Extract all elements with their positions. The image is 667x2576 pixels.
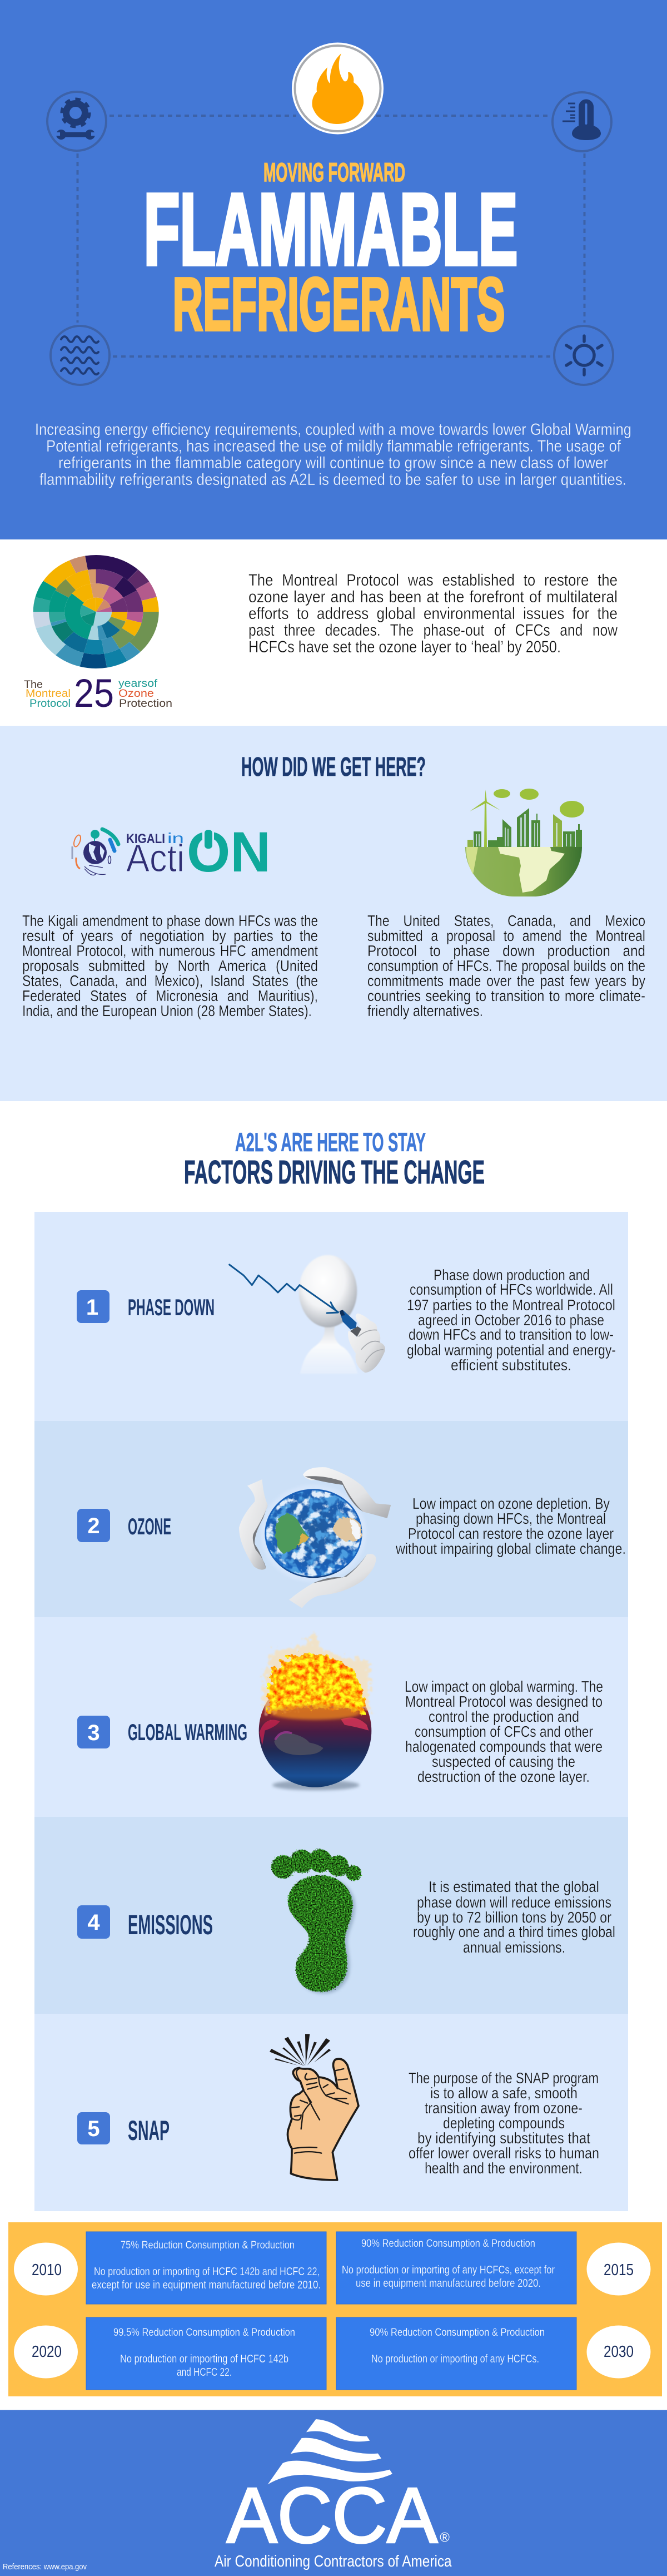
text: emissions: roughly one and a third times global	[413, 1923, 615, 1940]
text: phase down: efficient substitutes.	[451, 1356, 571, 1374]
text: emissions	[413, 1878, 615, 1956]
card 2030: No production or importing of any HCFCs.	[371, 2353, 539, 2365]
icon: waves	[51, 326, 109, 385]
text: emissions: phase down will reduce emissions	[417, 1894, 611, 1911]
text: SNAP	[409, 2069, 599, 2177]
logo text: 25 years of ozone protection: Protection	[119, 698, 172, 710]
text: phase down: global warming potential and energy-	[407, 1341, 616, 1359]
icon: flame badge	[292, 42, 384, 135]
Montreal Protocol text: efforts to address global environmental issues for the	[248, 605, 618, 623]
text: Kigali amendment: result of years of negotiation by parties to the	[22, 927, 318, 944]
badge 5	[77, 2112, 110, 2144]
logo text: 25 years of ozone protection: Ozone	[118, 688, 154, 700]
text: Kigali amendment: Federated States of Micronesia and Mauritius),	[22, 987, 318, 1004]
year 2010: 2010	[32, 2261, 62, 2279]
ring 3	[41, 562, 152, 662]
text: SNAP: depleting compounds	[443, 2114, 565, 2132]
logo: ACCA: Air Conditioning Contractors of America	[215, 2553, 452, 2570]
text: Kigali amendment	[22, 912, 318, 1019]
text: phase down: down HFCs and to transition to low-	[409, 1326, 614, 1343]
year 2015: 2015	[604, 2261, 634, 2279]
illustration: snapping fingers	[270, 2034, 359, 2180]
panel: 5 SNAP	[34, 2014, 628, 2211]
text: global warming: consumption of CFCs and other	[415, 1723, 593, 1740]
text: ozone: without impairing global climate change.	[395, 1540, 626, 1557]
card 2015	[336, 2232, 576, 2304]
text: global warming	[405, 1678, 603, 1785]
illustration: grass footprint	[271, 1849, 361, 1994]
illustration: green earth city	[465, 789, 584, 896]
headings: factors driving the change: A2L'S ARE HERE TO STAY	[235, 1127, 426, 1157]
logo text: 25 years of ozone protection: 25	[74, 672, 114, 716]
badge 2	[77, 1509, 110, 1542]
label: global warming: GLOBAL WARMING	[128, 1719, 247, 1745]
panel: phase-out timeline	[8, 2222, 662, 2396]
title: MOVING FORWARD	[263, 158, 405, 187]
year 2020	[14, 2326, 78, 2378]
text: United States, Canada, Mexico proposal	[367, 912, 645, 1019]
card 2010	[86, 2232, 326, 2304]
card 2030: 90% Reduction Consumption & Production	[370, 2326, 545, 2339]
year 2015	[587, 2242, 650, 2296]
text: Kigali amendment: The Kigali amendment to phase down HFCs was the	[22, 912, 318, 929]
text: SNAP: The purpose of the SNAP program	[409, 2069, 599, 2087]
badge 4	[77, 1905, 110, 1939]
badge 3	[77, 1716, 110, 1748]
card 2010: 75% Reduction Consumption & Production	[121, 2239, 295, 2251]
text: global warming: control the production and	[429, 1708, 579, 1725]
text: phase down: agreed in October 2016 to phase	[418, 1311, 604, 1329]
text: global warming: halogenated compounds that were	[405, 1738, 603, 1755]
text: phase down: Phase down production and	[434, 1266, 590, 1284]
logo: Montreal Protocol colour wheel	[18, 542, 174, 682]
icon: gear and wrench	[47, 92, 106, 151]
text: SNAP: health and the environment.	[425, 2159, 583, 2177]
text: Kigali amendment: proposals submitted by North America (United	[22, 957, 318, 974]
panel: 2 ozone	[34, 1421, 628, 1617]
logo text: 25 years of ozone protection: Protocol	[29, 698, 71, 710]
card 2010: No production or importing of HCFC 142b and HCFC 22,	[94, 2266, 320, 2278]
dashed connector frame	[78, 116, 585, 356]
badge 4: 4	[87, 1910, 100, 1935]
logo text: 25 years of ozone protection: Montreal	[26, 688, 71, 700]
illustration: figure drawing falling line	[230, 1255, 385, 1374]
logo: ACCA: ®	[440, 2530, 450, 2545]
card 2015: 90% Reduction Consumption & Production	[361, 2237, 535, 2250]
text: phase down: consumption of HFCs worldwide. All	[410, 1281, 613, 1298]
illustration: earth on fire	[259, 1631, 371, 1790]
card 2030	[336, 2317, 576, 2390]
text: emissions: by up to 72 billion tons by 2050 or	[417, 1909, 611, 1926]
panel: 4 emissions	[34, 1817, 628, 2014]
text: emissions: It is estimated that the global	[429, 1878, 599, 1895]
text: ozone: phasing down HFCs, the Montreal	[416, 1510, 606, 1527]
text: global warming: Low impact on global warming. The	[405, 1678, 603, 1695]
card 2010: except for use in equipment manufactured before 2010.	[92, 2279, 321, 2291]
text: SNAP: transition away from ozone-	[425, 2099, 583, 2117]
panel: footer	[0, 2410, 667, 2576]
ring 4	[18, 542, 174, 682]
label: ozone: OZONE	[128, 1513, 171, 1539]
logo text: 25 years of ozone protection: The	[24, 679, 43, 691]
ring 2	[63, 582, 129, 642]
logo text: 25 years of ozone protection: yearsof	[118, 678, 158, 690]
logo: Kigali in Action	[72, 820, 271, 884]
text: global warming: destruction of the ozone layer.	[417, 1768, 590, 1785]
logo: Kigali in Action: KIGALI	[126, 831, 165, 846]
text: Kigali amendment: Montreal Protocol, with numerous HFC amendment	[22, 942, 318, 959]
card 2020: and HCFC 22.	[177, 2366, 232, 2379]
year 2020: 2020	[32, 2343, 62, 2361]
card 2015: use in equipment manufactured before 2020.	[356, 2277, 541, 2290]
text: United States, Canada, Mexico proposal: friendly alternatives.	[367, 1002, 483, 1019]
text: ozone: Protocol can restore the ozone layer	[408, 1525, 614, 1542]
heading: HOW DID WE GET HERE?	[241, 752, 426, 782]
logo: ACCA	[215, 2419, 452, 2570]
text: ozone	[395, 1495, 626, 1557]
illustration: earth held by hands	[239, 1467, 391, 1608]
text: SNAP: is to allow a safe, smooth	[430, 2084, 578, 2102]
year 2030: 2030	[604, 2343, 634, 2361]
badge 1	[77, 1290, 109, 1323]
logo text: 25 years of ozone protection	[24, 672, 172, 716]
year 2030	[587, 2326, 650, 2378]
Montreal Protocol text: ozone layer and has been at the forefront of multilateral	[248, 588, 618, 606]
references: References: www.epa.gov	[3, 2562, 87, 2572]
text: phase down: 197 parties to the Montreal Protocol	[407, 1296, 615, 1314]
panel: 1 phase down	[34, 1212, 628, 1421]
logo: Kigali in Action: in	[167, 830, 184, 846]
year 2010	[14, 2242, 78, 2296]
card 2015: No production or importing of any HCFCs, except for	[342, 2264, 555, 2276]
text: global warming: suspected of causing the	[432, 1753, 575, 1770]
title	[143, 158, 518, 346]
text: global warming: Montreal Protocol was designed to	[405, 1693, 603, 1710]
logo: Kigali in Action: Acti	[126, 836, 185, 880]
text: emissions: annual emissions.	[463, 1939, 565, 1956]
text: Kigali amendment: States, Canada, and Mexico), Island States (the	[22, 972, 318, 989]
badge 1: 1	[86, 1295, 98, 1320]
icon: thermometer	[552, 92, 611, 151]
label: phase down: PHASE DOWN	[128, 1294, 215, 1320]
icon: sun	[554, 326, 613, 385]
label: SNAP: SNAP	[128, 2115, 170, 2146]
text: phase down	[407, 1266, 616, 1374]
panel: how did we get here	[0, 726, 667, 1101]
panel: header	[0, 0, 667, 539]
icon: Kigali globe and hands	[72, 829, 118, 875]
text: ozone: Low impact on ozone depletion. By	[412, 1495, 610, 1512]
label: emissions: EMISSIONS	[128, 1909, 213, 1940]
Montreal Protocol text: HCFCs have set the ozone layer to ‘heal’ by 2050.	[248, 638, 561, 656]
card 2020	[86, 2317, 326, 2390]
panel: 3 global warming	[34, 1617, 628, 1817]
text: SNAP: offer lower overall risks to human	[409, 2144, 599, 2162]
card 2020: 99.5% Reduction Consumption & Production	[113, 2326, 295, 2339]
ring 1	[85, 602, 107, 621]
logo: Kigali in Action: ON	[187, 820, 271, 884]
Montreal Protocol text	[248, 571, 618, 656]
text: Kigali amendment: India, and the European Union (28 Member States).	[22, 1002, 312, 1019]
badge 5: 5	[87, 2117, 100, 2141]
intro text	[35, 420, 631, 489]
badge 3: 3	[87, 1721, 100, 1745]
badge 2: 2	[87, 1514, 100, 1538]
text: SNAP: by identifying substitutes that	[417, 2129, 590, 2147]
logo: ACCA: ACCA	[227, 2471, 437, 2559]
Montreal Protocol text: The Montreal Protocol was established to restore the	[248, 571, 618, 589]
card 2020: No production or importing of HCFC 142b	[120, 2353, 288, 2365]
headings: factors driving the change	[184, 1127, 485, 1191]
